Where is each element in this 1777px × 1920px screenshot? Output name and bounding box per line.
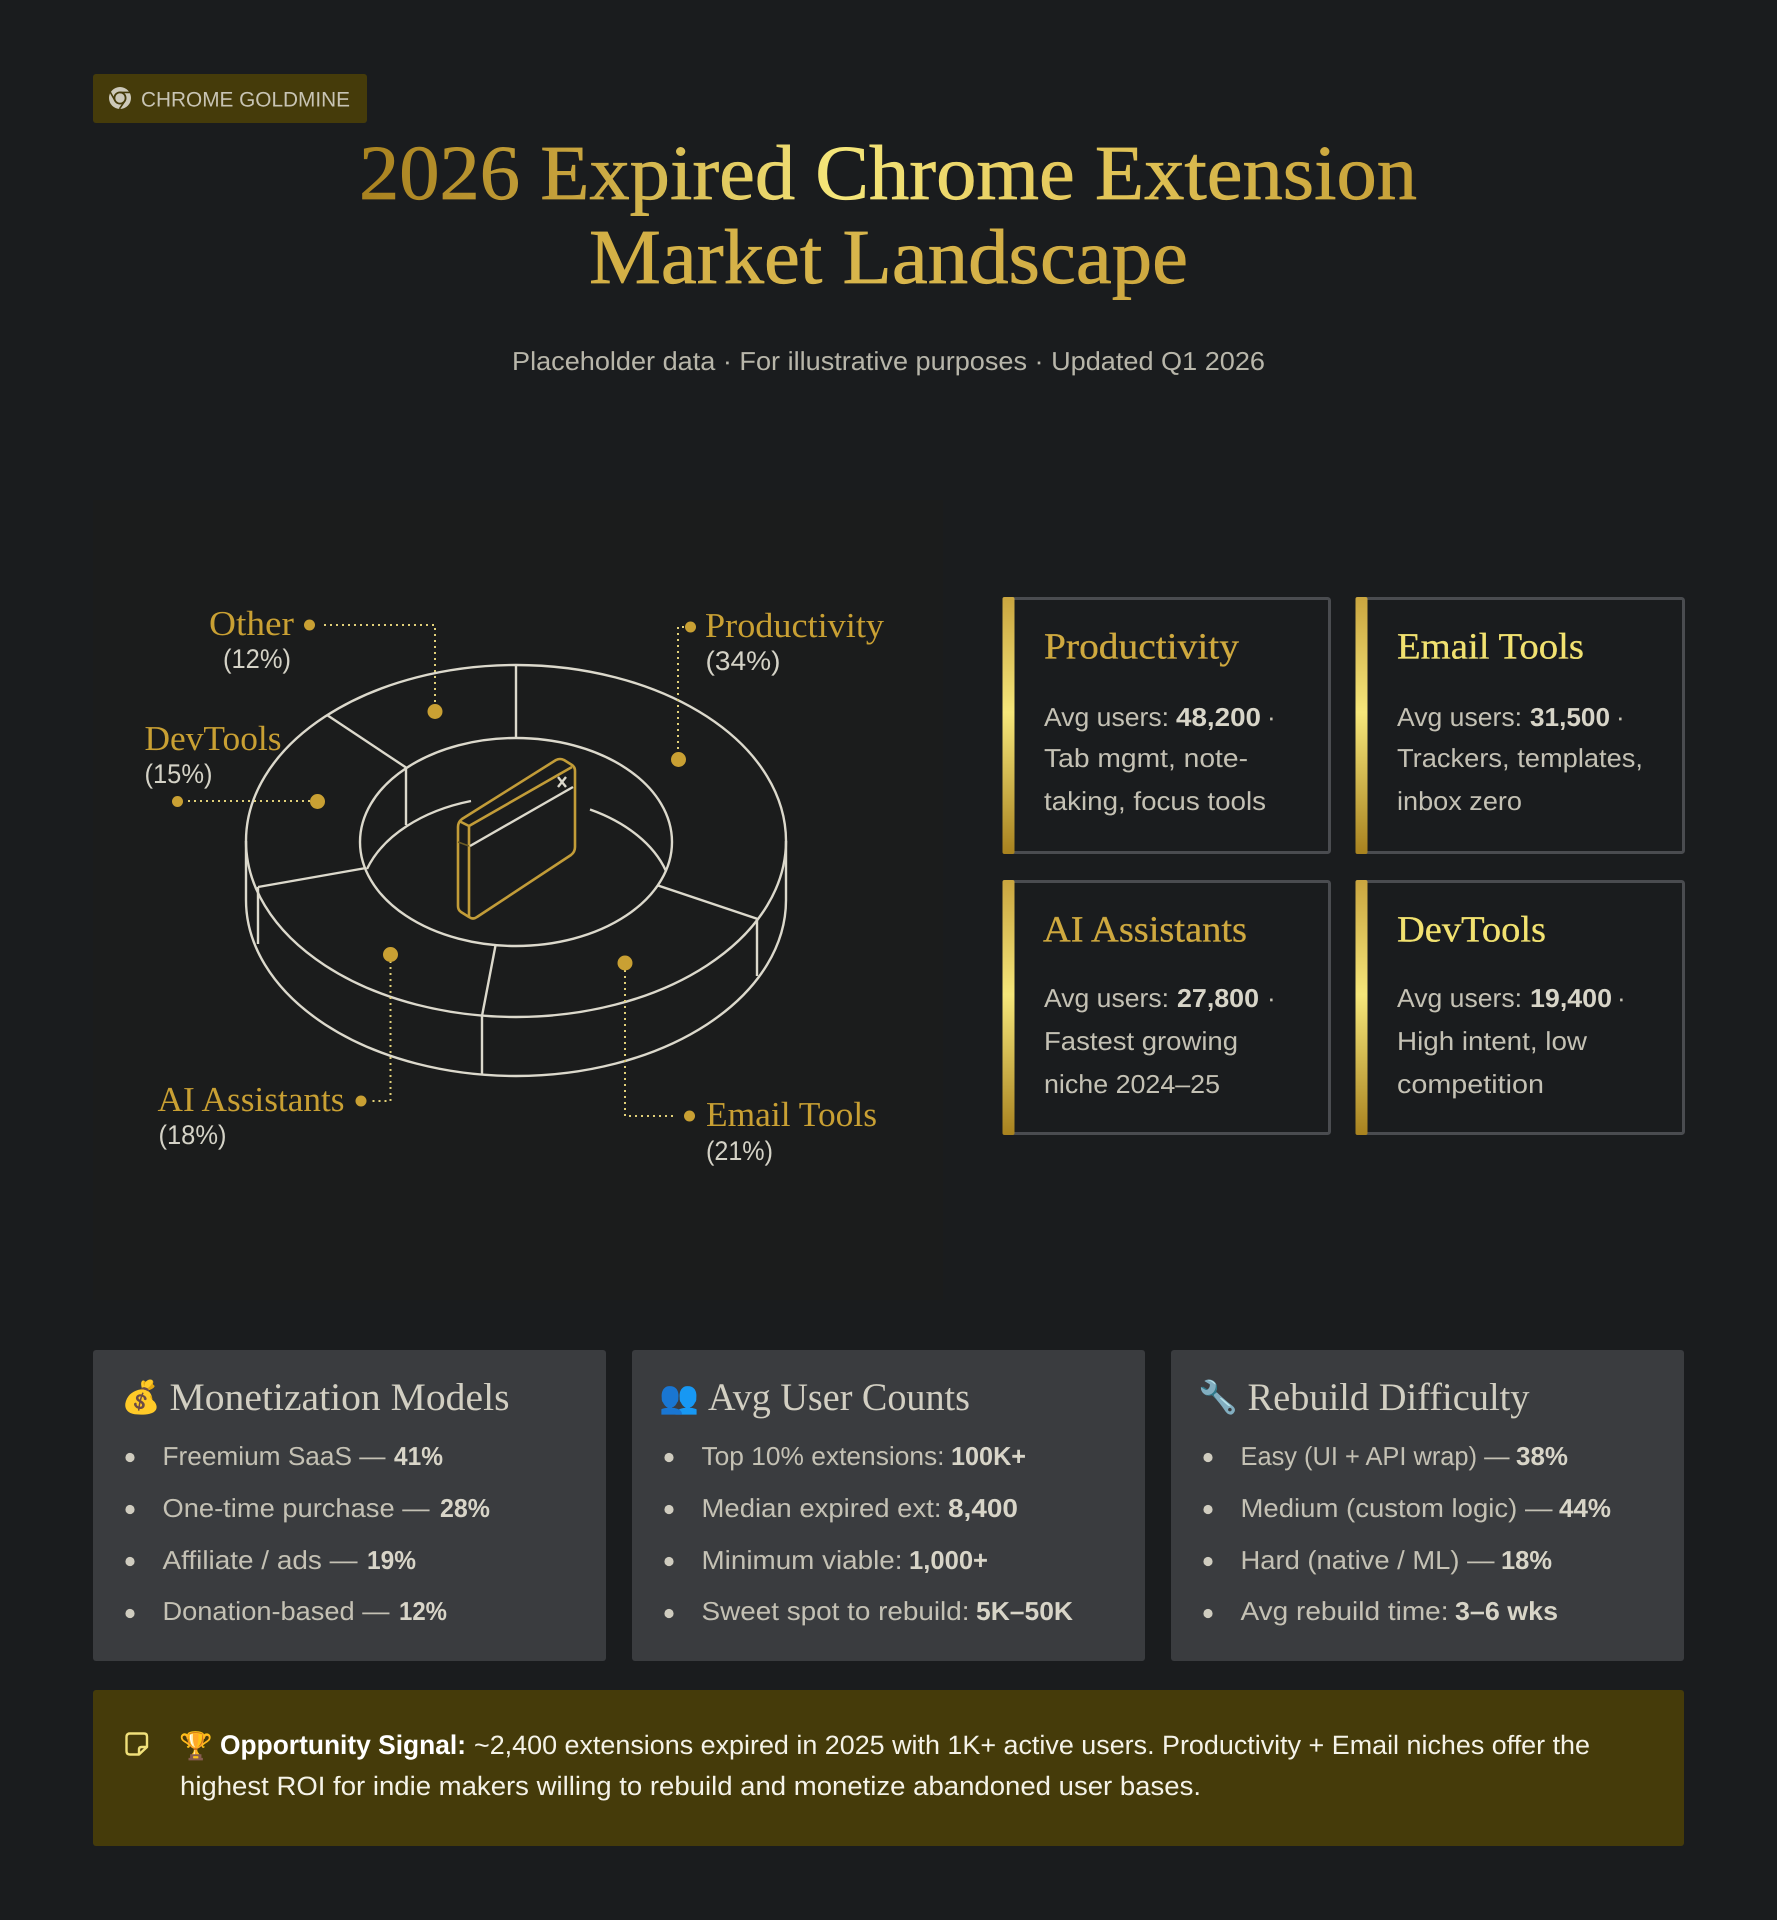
title: Market Landscape	[589, 213, 1188, 300]
card: Email Tools: 31,500	[1530, 702, 1610, 732]
list: user count items: Sweet spot to rebuild:	[702, 1596, 970, 1626]
list: user count items: 5K–50K	[976, 1596, 1073, 1626]
badge: Chrome Goldmine	[93, 74, 367, 123]
card: Email Tools: Trackers, templates,	[1397, 743, 1643, 773]
icon: wrench: 🔧	[1198, 1378, 1238, 1416]
card: DevTools: Avg users:	[1397, 983, 1522, 1013]
callout: DevTools: (15%)	[144, 759, 212, 789]
ring outline	[246, 664, 786, 1076]
panel: Avg User Counts	[632, 1350, 1145, 1661]
card: Productivity	[1002, 597, 1330, 854]
card: Email Tools: inbox zero	[1397, 786, 1522, 816]
title	[359, 129, 1417, 300]
callout: Email Tools	[618, 956, 877, 1166]
list: user count items	[664, 1441, 1073, 1626]
list: user count items: Median expired ext:	[702, 1493, 942, 1523]
card: DevTools: ·	[1617, 983, 1626, 1013]
callout: AI Assistants: (18%)	[158, 1120, 226, 1150]
icon: money bag: 💰	[121, 1378, 161, 1416]
panel: Rebuild Difficulty	[1171, 1350, 1684, 1661]
heading: Rebuild Difficulty: Rebuild Difficulty	[1248, 1376, 1530, 1419]
card: Productivity: Productivity	[1044, 626, 1240, 668]
card: Productivity: 48,200	[1176, 702, 1261, 732]
chart: market share ring	[93, 500, 943, 1300]
callout text: highest ROI for indie makers willing to rebuild and monetize abandoned user bases.	[180, 1771, 1201, 1801]
badge: Chrome Goldmine: CHROME GOLDMINE	[141, 88, 350, 112]
card: Productivity: taking, focus tools	[1044, 786, 1266, 816]
callout: AI Assistants: AI Assistants	[158, 1080, 344, 1119]
card: AI Assistants	[1002, 880, 1330, 1135]
panel: Monetization Models	[93, 1350, 606, 1661]
card: AI Assistants: AI Assistants	[1043, 910, 1247, 950]
list: monetization items: Affiliate / ads —	[162, 1545, 358, 1575]
card: Email Tools: Email Tools	[1397, 626, 1584, 668]
callout: Other: (12%)	[223, 644, 291, 674]
card: DevTools: High intent, low	[1397, 1026, 1587, 1056]
callout: DevTools	[144, 719, 325, 809]
heading: Monetization Models: Monetization Models	[170, 1376, 510, 1419]
card: DevTools: 19,400	[1530, 983, 1612, 1013]
list: difficulty items: Hard (native / ML) —	[1240, 1545, 1494, 1575]
icon: note	[126, 1734, 147, 1754]
card: AI Assistants: Fastest growing	[1044, 1026, 1238, 1056]
card: DevTools: DevTools	[1397, 910, 1546, 950]
card: Productivity: Tab mgmt, note-	[1044, 743, 1248, 773]
callout text: ~2,400 extensions expired in 2025 with 1K+ active users. Productivity + Email niches offer the	[474, 1730, 1590, 1760]
icon: browser window	[458, 759, 575, 918]
icon: trophy: 🏆	[179, 1730, 213, 1762]
card: Email Tools: ·	[1616, 702, 1625, 732]
callout: Email Tools: (21%)	[706, 1136, 773, 1166]
callout: Other	[209, 604, 442, 719]
list: difficulty items: Medium (custom logic) —	[1240, 1493, 1552, 1523]
callout text	[180, 1730, 1590, 1801]
list: monetization items: One-time purchase —	[162, 1493, 430, 1523]
list: difficulty items	[1203, 1441, 1611, 1626]
list: monetization items	[125, 1441, 490, 1626]
card: Email Tools	[1356, 597, 1684, 854]
heading: Avg User Counts: Avg User Counts	[708, 1376, 970, 1419]
icon: chrome logo	[109, 87, 131, 109]
callout: Productivity: Productivity	[705, 606, 885, 645]
list: monetization items: 41%	[394, 1441, 443, 1471]
list: monetization items: 12%	[399, 1596, 447, 1626]
card: DevTools: competition	[1397, 1069, 1544, 1099]
card: Productivity: ·	[1267, 702, 1276, 732]
card: AI Assistants: niche 2024–25	[1044, 1069, 1220, 1099]
list: monetization items: Freemium SaaS —	[162, 1441, 386, 1471]
card: Email Tools: Avg users:	[1397, 702, 1522, 732]
callout: Opportunity Signal	[93, 1690, 1684, 1846]
card: AI Assistants: 27,800	[1177, 983, 1259, 1013]
list: difficulty items: 18%	[1501, 1545, 1552, 1575]
callout: Other: Other	[209, 604, 294, 643]
callout: AI Assistants	[158, 947, 398, 1150]
callout: Productivity	[671, 606, 885, 767]
title: 2026 Expired Chrome Extension	[359, 129, 1417, 216]
card: DevTools	[1356, 880, 1684, 1135]
callout text: Opportunity Signal:	[220, 1730, 466, 1760]
list: user count items: 1,000+	[909, 1545, 988, 1575]
icon: users: 👥	[659, 1378, 699, 1416]
list: difficulty items: 38%	[1516, 1441, 1568, 1471]
card: AI Assistants: Avg users:	[1044, 983, 1169, 1013]
list: monetization items: 28%	[440, 1493, 490, 1523]
card: Productivity: Avg users:	[1044, 702, 1169, 732]
list: user count items: 100K+	[951, 1441, 1026, 1471]
list: user count items: Minimum viable:	[702, 1545, 902, 1575]
list: difficulty items: Avg rebuild time:	[1240, 1596, 1448, 1626]
list: difficulty items: 3–6 wks	[1455, 1596, 1558, 1626]
list: user count items: Top 10% extensions:	[702, 1441, 944, 1471]
list: difficulty items: 44%	[1559, 1493, 1611, 1523]
subtitle: Placeholder data · For illustrative purposes · Updated Q1 2026	[512, 346, 1265, 376]
list: monetization items: 19%	[367, 1545, 416, 1575]
list: monetization items: Donation-based —	[162, 1596, 390, 1626]
callout: Email Tools: Email Tools	[706, 1095, 877, 1134]
card: AI Assistants: ·	[1267, 983, 1276, 1013]
callout: Productivity: (34%)	[706, 646, 780, 676]
list: user count items: 8,400	[948, 1493, 1018, 1523]
list: difficulty items: Easy (UI + API wrap) —	[1240, 1441, 1510, 1471]
callout: DevTools: DevTools	[144, 719, 282, 758]
